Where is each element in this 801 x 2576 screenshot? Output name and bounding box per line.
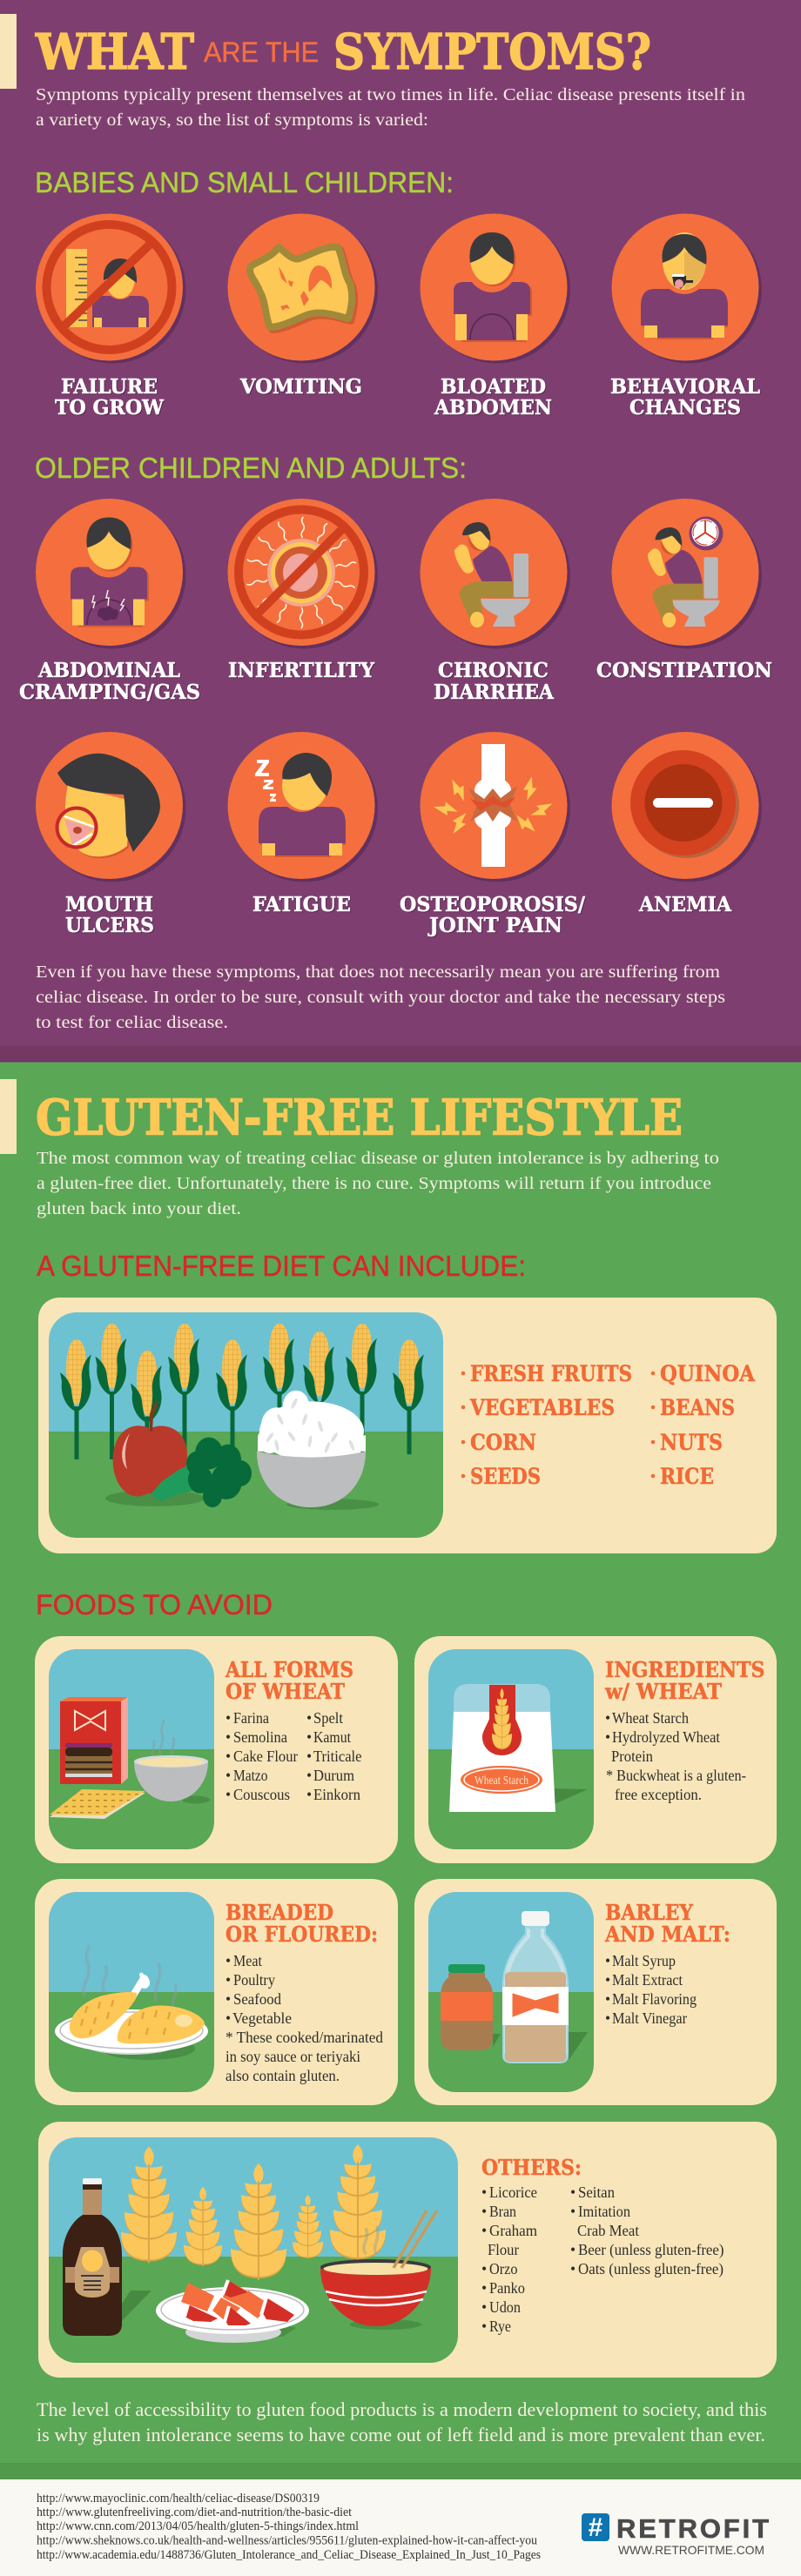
icon: infertility — [228, 499, 378, 649]
text: others: Graham — [489, 2222, 537, 2239]
text: all forms of wheat: • — [306, 1767, 312, 1784]
icon: bloated abdomen — [420, 214, 570, 364]
heading: babies and small children: BABIES AND SMALL CHILDREN: — [35, 167, 454, 199]
text: barley and malt: Malt Flavoring — [612, 1990, 697, 2008]
captions: row three: ANEMIA — [638, 893, 732, 916]
logo: retrofit — [582, 2513, 769, 2557]
panel: breaded or floured — [35, 1879, 398, 2105]
illustration: wheat, bottle, crab, noodle bowl — [49, 2137, 458, 2363]
sources: http://www.glutenfreeliving.com/diet-and-nutrition/the-basic-diet — [37, 2506, 352, 2519]
text: breaded or floured: Vegetable — [232, 2009, 292, 2027]
panel: purple symptoms section — [0, 0, 801, 1062]
text: others: • — [570, 2260, 576, 2277]
heading: older children and adults: OLDER CHILDREN AND ADULTS: — [35, 453, 467, 485]
text: others: Flour — [488, 2241, 519, 2258]
logo: retrofit: WWW.RETROFITME.COM — [618, 2543, 764, 2557]
text: others: • — [481, 2298, 487, 2316]
text: all forms of wheat: • — [225, 1748, 231, 1765]
text: ingredients with wheat: • — [605, 1709, 610, 1727]
text: breaded or floured: also contain gluten. — [225, 2067, 340, 2084]
intro text: The most common way of treating celiac disease or gluten intolerance is by adhering to — [37, 1149, 719, 1168]
text: ingredients with wheat: w/ WHEAT — [604, 1679, 722, 1704]
text: all forms of wheat: Cake Flour — [233, 1748, 298, 1765]
icon: anemia — [611, 732, 762, 882]
sources: http://www.sheknows.co.uk/health-and-wellness/articles/955611/gluten-explained-how-it-can-affect-you — [37, 2534, 537, 2548]
captions: row one: BEHAVIORAL — [610, 375, 760, 399]
text: barley and malt: Malt Syrup — [612, 1952, 676, 1969]
captions: row one: FAILURE — [61, 375, 158, 399]
logo: retrofit: RETROFIT — [616, 2513, 769, 2544]
text: all forms of wheat: ALL FORMS — [225, 1657, 353, 1682]
sources — [37, 2492, 541, 2562]
text: all forms of wheat: Matzo — [233, 1767, 268, 1784]
list: allowed foods — [461, 1361, 756, 1489]
captions: row two: ABDOMINAL — [37, 659, 180, 682]
text: others: Udon — [489, 2298, 521, 2316]
captions: row three: OSTEOPOROSIS/ — [400, 893, 586, 916]
text: breaded or floured: • — [225, 2009, 231, 2027]
text: others: Panko — [489, 2279, 525, 2297]
illustration: jar and bottle — [428, 1892, 594, 2092]
sources: http://www.cnn.com/2013/04/05/health/gluten-5-things/index.html — [37, 2519, 359, 2533]
text: breaded or floured: * These cooked/marinated — [225, 2029, 383, 2046]
captions: row two: INFERTILITY — [228, 659, 375, 682]
text: others — [481, 2155, 724, 2335]
intro text — [36, 85, 745, 130]
logo: retrofit: # — [589, 2513, 603, 2542]
title: ARE THE — [204, 37, 319, 68]
captions: row three: JOINT PAIN — [427, 914, 562, 937]
text: ingredients with wheat: INGREDIENTS — [605, 1657, 764, 1682]
title: SYMPTOMS? — [333, 23, 651, 81]
illustration: wheat starch bag — [428, 1649, 594, 1849]
text: barley and malt: • — [605, 1990, 610, 2008]
text: breaded or floured: BREADED — [225, 1900, 333, 1925]
icon: constipation — [611, 499, 762, 649]
title: GLUTEN-FREE LIFESTYLE — [36, 1090, 683, 1147]
closing symptoms text: to test for celiac disease. — [36, 1013, 228, 1032]
text: others: • — [481, 2222, 487, 2239]
panel: others — [38, 2122, 777, 2378]
text: breaded or floured: • — [225, 1952, 231, 1969]
text: all forms of wheat: Couscous — [233, 1786, 290, 1803]
text: ingredients with wheat — [604, 1657, 764, 1803]
illustration: corn, apple, broccoli, rice — [49, 1312, 443, 1538]
text: barley and malt: • — [605, 1971, 610, 1989]
text: breaded or floured: • — [225, 1971, 231, 1989]
panel: diet can include — [38, 1298, 777, 1553]
text: others: • — [570, 2241, 576, 2258]
text: others: Bran — [489, 2203, 516, 2220]
text: all forms of wheat: • — [306, 1748, 312, 1765]
list: allowed foods: RICE — [660, 1464, 714, 1489]
panel: footer — [0, 2479, 801, 2576]
icon: mouth ulcers — [36, 732, 186, 882]
text: ingredients with wheat: • — [605, 1728, 610, 1746]
text: barley and malt: BARLEY — [605, 1900, 694, 1925]
captions: row two — [19, 659, 772, 704]
closing text: is why gluten intolerance seems to have come out of left field and is more prevalent than ever. — [37, 2424, 765, 2445]
text: all forms of wheat: OF WHEAT — [225, 1679, 345, 1704]
captions: row three: MOUTH — [65, 893, 153, 916]
captions: row two: CRAMPING/GAS — [19, 681, 200, 704]
text: all forms of wheat: • — [225, 1767, 231, 1784]
text: all forms of wheat: Farina — [233, 1709, 269, 1727]
list: allowed foods: FRESH FRUITS — [470, 1361, 632, 1386]
text: barley and malt: Malt Extract — [612, 1971, 683, 1989]
sources: http://www.academia.edu/1488736/Gluten_Intolerance_and_Celiac_Disease_Explained_In_Just_10_Pages — [37, 2548, 541, 2562]
text: others: OTHERS: — [481, 2155, 582, 2180]
captions: row one: TO GROW — [55, 396, 165, 419]
text: breaded or floured: • — [225, 1990, 231, 2008]
text: ingredients with wheat: Wheat Starch — [612, 1709, 689, 1727]
list: allowed foods: NUTS — [660, 1430, 723, 1455]
text: others: • — [481, 2203, 487, 2220]
list: allowed foods: SEEDS — [470, 1464, 541, 1489]
text: all forms of wheat: Kamut — [313, 1728, 351, 1746]
list: allowed foods: VEGETABLES — [469, 1395, 615, 1420]
text: others: Beer (unless gluten-free) — [578, 2241, 724, 2258]
panel: all forms of wheat — [35, 1636, 398, 1863]
text: others: • — [481, 2260, 487, 2277]
title — [35, 23, 651, 81]
icon: abdominal cramping — [36, 499, 186, 649]
panel: barley and malt — [414, 1879, 777, 2105]
panel: green gluten-free section — [0, 1062, 801, 2479]
icon: chronic diarrhea — [420, 499, 570, 649]
text: ingredients with wheat: * Buckwheat is a gluten- — [606, 1767, 746, 1784]
text: all forms of wheat: • — [306, 1786, 312, 1803]
intro text: gluten back into your diet. — [37, 1199, 241, 1218]
intro text: Symptoms typically present themselves at two times in life. Celiac disease presents itself in — [36, 85, 745, 104]
illustration: fried chicken plate — [49, 1892, 214, 2092]
closing symptoms text: Even if you have these symptoms, that does not necessarily mean you are suffering from — [36, 963, 720, 982]
captions: row one: ABDOMEN — [434, 396, 552, 419]
captions: row one: CHANGES — [629, 396, 741, 419]
captions: row two: CONSTIPATION — [596, 659, 772, 682]
text: barley and malt: • — [605, 1952, 610, 1969]
text: others: • — [481, 2184, 487, 2201]
text: all forms of wheat — [225, 1657, 362, 1803]
title: WHAT — [35, 23, 194, 81]
text: all forms of wheat: Triticale — [313, 1748, 362, 1765]
illustration: cereal box, bowl, crackers — [49, 1649, 214, 1849]
text: breaded or floured: Seafood — [233, 1990, 281, 2008]
text: all forms of wheat: • — [306, 1728, 312, 1746]
closing text — [37, 2398, 767, 2445]
closing symptoms text: celiac disease. In order to be sure, consult with your doctor and take the necessary steps — [36, 988, 725, 1007]
icon: vomiting — [228, 214, 378, 364]
captions: row two: DIARRHEA — [434, 681, 555, 704]
captions: row one: VOMITING — [239, 375, 362, 399]
text: barley and malt — [604, 1900, 730, 2027]
text: others: • — [481, 2318, 487, 2335]
illustration: wheat starch bag: Wheat Starch — [475, 1774, 528, 1787]
text: others: Seitan — [578, 2184, 615, 2201]
heading: diet can include: A GLUTEN-FREE DIET CAN INCLUDE: — [37, 1251, 526, 1283]
text: all forms of wheat: • — [225, 1786, 231, 1803]
list: allowed foods: BEANS — [660, 1395, 735, 1420]
icon: fatigue — [228, 732, 378, 882]
text: others: Imitation — [578, 2203, 630, 2220]
closing text: The level of accessibility to gluten food products is a modern development to society, and this — [37, 2398, 767, 2420]
text: others: • — [570, 2203, 576, 2220]
text: all forms of wheat: Durum — [313, 1767, 354, 1784]
text: others: Crab Meat — [577, 2222, 639, 2239]
text: all forms of wheat: • — [225, 1728, 231, 1746]
text: others: • — [481, 2279, 487, 2297]
captions: row three — [65, 893, 732, 937]
text: others: • — [570, 2184, 576, 2201]
text: all forms of wheat: Semolina — [233, 1728, 287, 1746]
text: breaded or floured: Poultry — [233, 1971, 275, 1989]
text: all forms of wheat: • — [225, 1709, 231, 1727]
text: ingredients with wheat: Protein — [611, 1748, 653, 1765]
intro text: a gluten-free diet. Unfortunately, there is no cure. Symptoms will return if you introduce — [37, 1174, 711, 1193]
tab accent — [0, 14, 17, 89]
list: allowed foods: CORN — [470, 1430, 536, 1455]
text: others: Licorice — [489, 2184, 537, 2201]
panel: ingredients with wheat — [414, 1636, 777, 1863]
text: barley and malt: Malt Vinegar — [612, 2009, 687, 2027]
icon: joint pain — [420, 732, 570, 882]
sources: http://www.mayoclinic.com/health/celiac-disease/DS00319 — [37, 2492, 320, 2506]
text: ingredients with wheat: Hydrolyzed Wheat — [612, 1728, 720, 1746]
text: all forms of wheat: Spelt — [313, 1709, 343, 1727]
closing symptoms text — [36, 963, 725, 1032]
captions: row one — [55, 375, 760, 419]
captions: row one: BLOATED — [441, 375, 546, 399]
text: others: Rye — [489, 2318, 511, 2335]
intro text — [37, 1149, 719, 1218]
intro text: a variety of ways, so the list of symptoms is varied: — [36, 111, 428, 130]
text: barley and malt: AND MALT: — [604, 1922, 730, 1947]
icon: behavioral changes — [611, 214, 762, 364]
text: all forms of wheat: Einkorn — [313, 1786, 360, 1803]
text: ingredients with wheat: free exception. — [615, 1786, 702, 1803]
text: breaded or floured: in soy sauce or teriyaki — [225, 2048, 360, 2065]
text: barley and malt: • — [605, 2009, 610, 2027]
text: breaded or floured — [225, 1900, 383, 2084]
text: breaded or floured: OR FLOURED: — [225, 1922, 378, 1947]
text: others: Oats (unless gluten-free) — [578, 2260, 724, 2277]
text: others: Orzo — [489, 2260, 518, 2277]
heading: foods to avoid: FOODS TO AVOID — [36, 1589, 273, 1620]
tab accent — [0, 1079, 17, 1154]
text: all forms of wheat: • — [306, 1709, 312, 1727]
icon: failure to grow — [36, 214, 186, 364]
list: allowed foods: QUINOA — [660, 1361, 756, 1386]
captions: row three: FATIGUE — [252, 893, 351, 916]
text: breaded or floured: Meat — [233, 1952, 262, 1969]
captions: row two: CHRONIC — [438, 659, 549, 682]
captions: row three: ULCERS — [65, 914, 154, 937]
